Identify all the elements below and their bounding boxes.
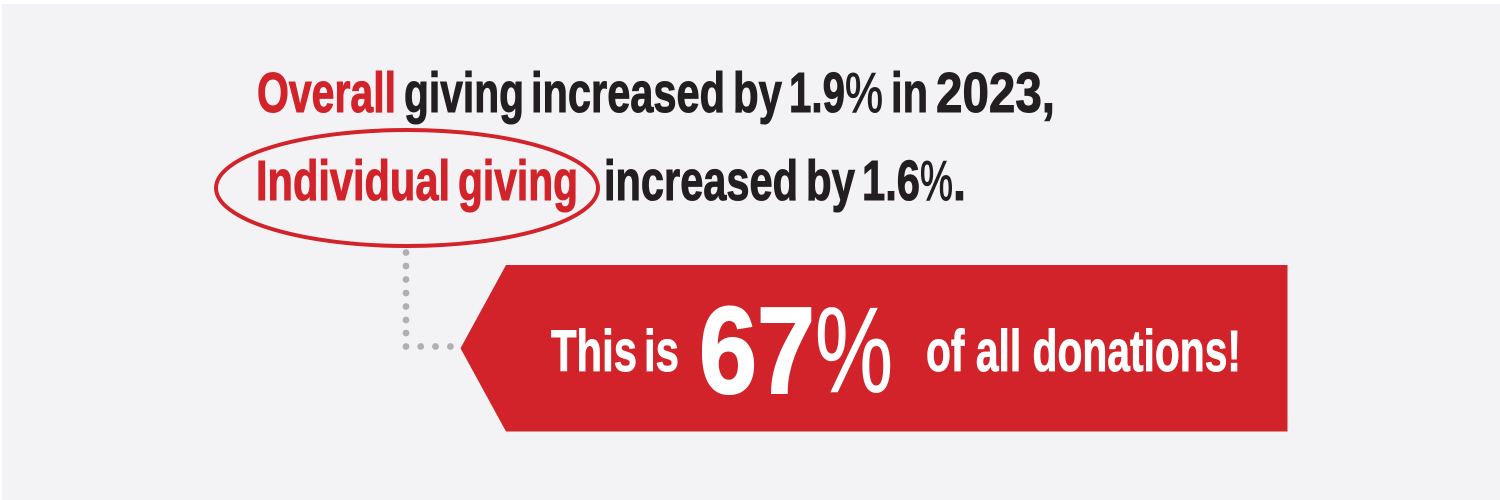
callout ellipse around individual giving [216,130,598,246]
heading: overall giving line: in [891,61,928,125]
big number: 67%: 67 [699,283,815,420]
heading: overall giving line: % [845,61,883,125]
heading: overall giving line: Overall [257,61,396,125]
heading: individual giving line: . [953,149,966,213]
heading: overall giving line [257,61,1055,125]
heading: individual giving line: % [920,149,953,213]
heading: individual giving line: by [806,149,855,213]
heading: overall giving line: giving [404,61,524,125]
heading: overall giving line: 2023, [936,61,1055,125]
heading: overall giving line: 1.9 [789,61,845,125]
heading: individual giving line: 1.6 [862,149,920,213]
heading: overall giving line: increased [531,61,725,125]
tag text: this is: This [551,319,637,384]
tag text: this is: is [644,319,679,384]
tag shape [460,265,1288,432]
heading: individual giving line: giving [458,149,578,213]
heading: individual giving line [256,149,966,213]
tag text: of all donations: of all donations! [926,319,1241,384]
callout tag: 67% of all donations [460,265,1288,432]
big number: 67%: % [815,282,893,418]
heading: individual giving line: increased [604,149,798,213]
heading: overall giving line: by [733,61,782,125]
dotted connector [403,249,454,350]
heading: individual giving line: Individual [256,149,450,213]
